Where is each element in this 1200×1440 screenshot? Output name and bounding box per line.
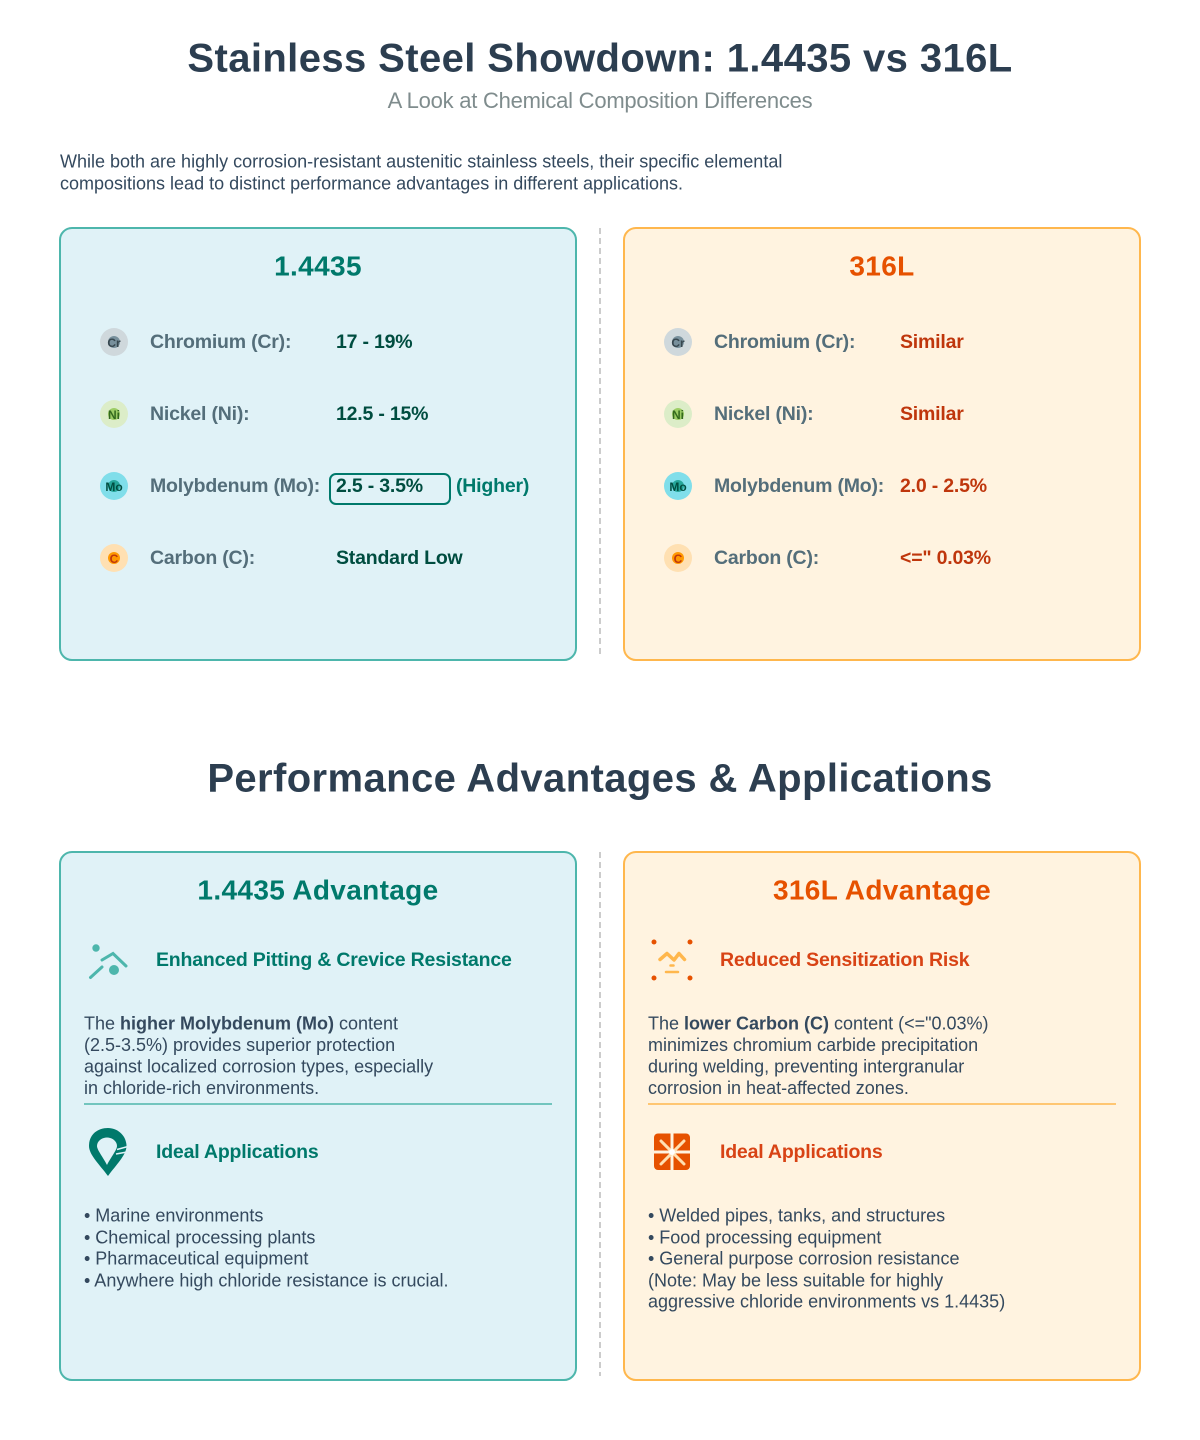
panel: 1.4435 composition: [60, 228, 576, 660]
row: molybdenum: Mo: [669, 480, 687, 494]
panel: 316L composition: [624, 228, 1140, 660]
row: carbon: [664, 544, 991, 572]
intro text: compositions lead to distinct performance advantages in different applications.: [60, 174, 683, 194]
body text: The lower Carbon (C) content (<="0.03%): [648, 1014, 989, 1034]
row: nickel: Nickel (Ni):: [150, 403, 249, 425]
section heading: Performance Advantages & Applications: [207, 756, 993, 800]
row: nickel: Nickel (Ni):: [714, 403, 813, 425]
row: chromium: Cr: [107, 336, 121, 350]
row: molybdenum: [100, 472, 529, 504]
application list: [84, 1206, 448, 1290]
row: molybdenum: [664, 472, 987, 500]
row: chromium: Chromium (Cr):: [150, 331, 291, 353]
subheading: Enhanced Pitting & Crevice Resistance: [156, 949, 512, 971]
application list: (Note: May be less suitable for highly: [648, 1270, 943, 1290]
title: Stainless Steel Showdown: 1.4435 vs 316L: [187, 36, 1013, 80]
icon: starburst square: [652, 1131, 692, 1173]
body text: [84, 1014, 433, 1098]
panel: 316L advantage: [624, 852, 1140, 1380]
application list: • General purpose corrosion resistance: [648, 1248, 959, 1268]
row: chromium: Chromium (Cr):: [714, 331, 855, 353]
row: chromium: Cr: [671, 336, 685, 350]
row: carbon: Carbon (C):: [150, 547, 255, 569]
application list: • Chemical processing plants: [84, 1228, 315, 1248]
subheading: Ideal Applications: [156, 1141, 319, 1163]
subheading: Ideal Applications: [720, 1141, 883, 1163]
application list: • Marine environments: [84, 1206, 263, 1226]
row: chromium: Similar: [900, 331, 964, 353]
icon: location shield: [89, 1128, 128, 1176]
row: carbon: Carbon (C):: [714, 547, 819, 569]
row: molybdenum: 2.0 - 2.5%: [900, 475, 987, 497]
row: chromium: [664, 328, 964, 356]
application list: • Pharmaceutical equipment: [84, 1248, 308, 1268]
row: carbon: [100, 544, 464, 572]
row: nickel: Ni: [672, 408, 684, 422]
row: carbon: Standard Low: [336, 547, 464, 569]
row: molybdenum: Molybdenum (Mo):: [150, 475, 320, 497]
row: nickel: 12.5 - 15%: [336, 403, 428, 425]
body text: during welding, preventing intergranular: [648, 1056, 964, 1076]
application list: • Food processing equipment: [648, 1228, 881, 1248]
row: chromium: [100, 328, 412, 356]
body text: corrosion in heat-affected zones.: [648, 1078, 909, 1098]
row: carbon: <=" 0.03%: [900, 547, 991, 569]
icon: pitting resistance: [90, 944, 126, 978]
row: nickel: Similar: [900, 403, 964, 425]
row: carbon: C: [110, 552, 119, 566]
row: molybdenum: Mo: [105, 480, 123, 494]
subtitle: A Look at Chemical Composition Differences: [388, 88, 813, 113]
intro text: While both are highly corrosion-resistant austenitic stainless steels, their specific elemental: [60, 152, 782, 172]
application list: • Welded pipes, tanks, and structures: [648, 1206, 945, 1226]
panel: 1.4435 advantage: [60, 852, 576, 1380]
body text: minimizes chromium carbide precipitation: [648, 1035, 978, 1055]
body text: The higher Molybdenum (Mo) content: [84, 1014, 398, 1034]
row: carbon: C: [674, 552, 683, 566]
highlight box: [330, 474, 450, 504]
subheading: Reduced Sensitization Risk: [720, 949, 970, 971]
application list: [648, 1206, 1005, 1312]
application list: • Anywhere high chloride resistance is crucial.: [84, 1270, 448, 1290]
panel heading: 316L Advantage: [773, 874, 991, 906]
row: nickel: [100, 400, 428, 428]
body text: against localized corrosion types, especially: [84, 1056, 433, 1076]
panel heading: 1.4435: 1.4435: [274, 250, 362, 282]
row: nickel: [664, 400, 964, 428]
row: molybdenum: (Higher): [456, 475, 529, 497]
row: chromium: 17 - 19%: [336, 331, 412, 353]
body text: in chloride-rich environments.: [84, 1078, 319, 1098]
row: molybdenum: Molybdenum (Mo):: [714, 475, 884, 497]
icon: sensitization: [652, 940, 692, 980]
body text: (2.5-3.5%) provides superior protection: [84, 1035, 395, 1055]
body text: [648, 1014, 989, 1098]
row: molybdenum: 2.5 - 3.5%: [336, 475, 423, 497]
panel heading: 1.4435 Advantage: [197, 874, 439, 906]
panel heading: 316L: 316L: [849, 250, 915, 282]
intro text: [60, 152, 782, 194]
application list: aggressive chloride environments vs 1.4435): [648, 1292, 1005, 1312]
row: nickel: Ni: [108, 408, 120, 422]
